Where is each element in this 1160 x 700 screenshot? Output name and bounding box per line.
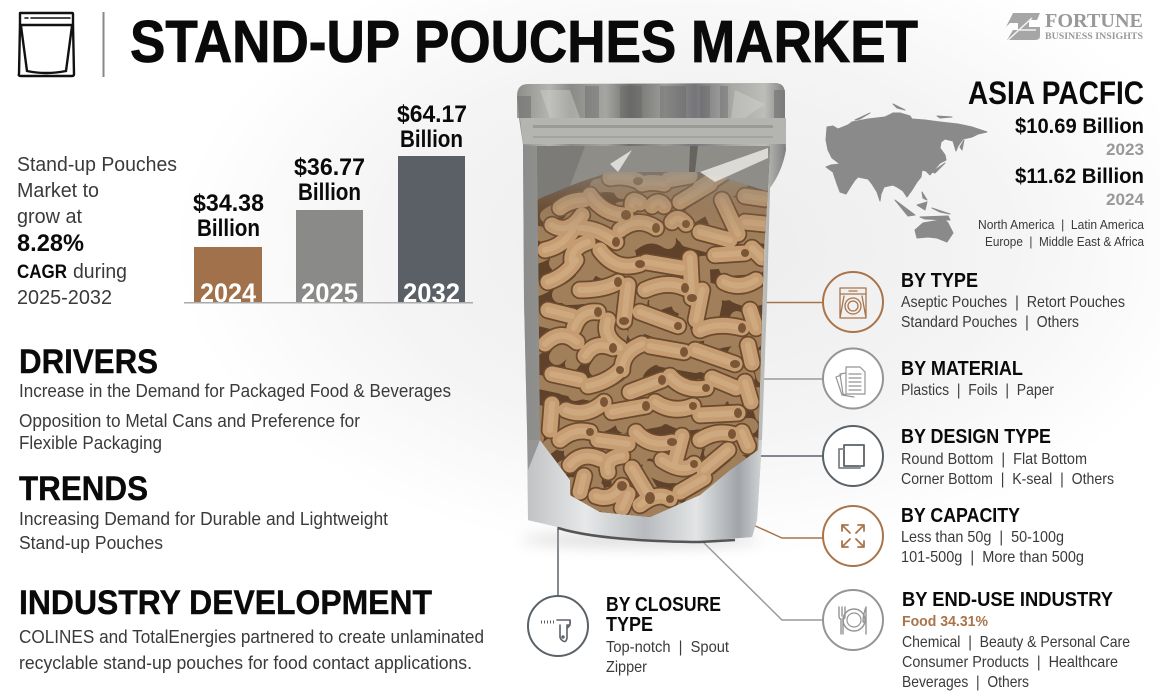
panel: by capacity: 101-500g | More than 500g bbox=[901, 549, 1084, 566]
panel: by type: Standard Pouches | Others bbox=[901, 314, 1079, 331]
panel: by type: BY TYPE bbox=[901, 270, 978, 292]
product image: stand-up pouch with pasta bbox=[517, 83, 786, 547]
panel: Asia Pacific: 2024 bbox=[1106, 190, 1145, 209]
panel: by design type: BY DESIGN TYPE bbox=[901, 426, 1051, 448]
pouch bottom rim bbox=[558, 528, 735, 542]
panel: by closure type: Zipper bbox=[606, 659, 648, 676]
CAGR text block: 8.28% bbox=[17, 230, 84, 257]
zipper band bbox=[520, 118, 786, 144]
icon: expand arrows bbox=[823, 506, 883, 566]
panel: industry development: recyclable stand-up pouches for food contact applications. bbox=[19, 653, 472, 673]
panel: by capacity: BY CAPACITY bbox=[901, 505, 1021, 527]
panel: by end-use industry: Consumer Products | Healthcare bbox=[902, 654, 1118, 671]
pouch body bbox=[517, 83, 786, 541]
panel: Asia Pacific: $10.69 Billion bbox=[1015, 115, 1144, 138]
panel: by material bbox=[823, 348, 1055, 408]
panel: by material: BY MATERIAL bbox=[901, 358, 1023, 380]
bar chart: market size bbox=[184, 101, 473, 308]
panel: by capacity bbox=[823, 505, 1084, 566]
CAGR text block: CAGR bbox=[17, 262, 67, 283]
map: Asia Pacific bbox=[826, 104, 987, 242]
CAGR text block: 2025-2032 bbox=[17, 287, 112, 309]
bar 2024: $34.38 bbox=[193, 190, 264, 217]
logo: Fortune Business Insights: FORTUNE bbox=[1045, 10, 1143, 32]
bar 2025: Billion bbox=[298, 179, 361, 206]
panel: industry development: COLINES and TotalEnergies partnered to create unlaminated bbox=[19, 627, 484, 647]
panel: drivers: Opposition to Metal Cans and Preference for bbox=[19, 411, 360, 431]
panel: by end-use industry: Food 34.31% bbox=[902, 613, 988, 630]
panel: by end-use industry: Beverages | Others bbox=[902, 674, 1029, 691]
panel: by end-use industry: Chemical | Beauty & Personal Care bbox=[902, 634, 1130, 651]
panel: drivers: Flexible Packaging bbox=[19, 433, 162, 453]
panel: by end-use industry bbox=[823, 589, 1130, 691]
title: STAND-UP POUCHES MARKET bbox=[130, 9, 918, 75]
icon: plate and cutlery bbox=[823, 590, 883, 650]
panel: trends: Increasing Demand for Durable and Lightweight bbox=[19, 509, 388, 529]
icon: pouch with circle bbox=[823, 272, 883, 332]
bar 2032 bbox=[397, 101, 467, 308]
panel: by design type bbox=[823, 426, 1114, 488]
panel: trends: TRENDS bbox=[19, 470, 148, 508]
panel: trends: Stand-up Pouches bbox=[19, 533, 163, 553]
panel: by type bbox=[823, 270, 1125, 332]
window with pasta bbox=[530, 140, 777, 525]
icon: paper sheets bbox=[823, 348, 883, 408]
logo: Fortune Business Insights bbox=[1006, 10, 1143, 42]
logo: Fortune Business Insights: BUSINESS INSIGHTS bbox=[1045, 32, 1143, 42]
panel: by closure type bbox=[528, 594, 730, 676]
panel: by closure type: BY CLOSURE bbox=[606, 594, 721, 616]
bar 2025 bbox=[294, 154, 365, 308]
panel: Asia Pacific: 2023 bbox=[1106, 140, 1144, 159]
bar 2025: 2025 bbox=[301, 278, 358, 308]
panel: Asia Pacific: North America | Latin America bbox=[978, 217, 1145, 232]
CAGR text block: Market to bbox=[17, 180, 99, 202]
bar 2024: 2024 bbox=[200, 278, 256, 308]
panel: by design type: Round Bottom | Flat Bottom bbox=[901, 451, 1087, 468]
panel: Asia Pacific: Europe | Middle East & Africa bbox=[985, 234, 1145, 249]
panel: industry development bbox=[19, 584, 484, 673]
panel: trends bbox=[19, 470, 388, 553]
pouch bottom gusset bbox=[527, 440, 762, 541]
CAGR text block: during bbox=[73, 261, 127, 283]
panel: by closure type: TYPE bbox=[606, 614, 653, 636]
panel: drivers: DRIVERS bbox=[19, 343, 158, 381]
CAGR text block: grow at bbox=[17, 206, 82, 228]
bar 2024 bbox=[193, 190, 264, 308]
panel: drivers bbox=[19, 343, 451, 453]
bar 2032: $64.17 bbox=[397, 101, 467, 128]
panel: Asia Pacific: $11.62 Billion bbox=[1015, 165, 1144, 188]
panel: drivers: Increase in the Demand for Packaged Food & Beverages bbox=[19, 381, 451, 401]
CAGR text block: Stand-up Pouches bbox=[17, 154, 177, 176]
panel: industry development: INDUSTRY DEVELOPMENT bbox=[19, 584, 432, 622]
panel: by end-use industry: BY END-USE INDUSTRY bbox=[902, 589, 1114, 611]
icon: zipper closure bbox=[528, 596, 588, 656]
bar 2024: Billion bbox=[197, 215, 260, 242]
pouch side seam bbox=[523, 145, 540, 470]
bar 2032: 2032 bbox=[403, 278, 460, 308]
panel: by capacity: Less than 50g | 50-100g bbox=[901, 529, 1064, 546]
title divider bbox=[102, 12, 104, 77]
panel: by material: Plastics | Foils | Paper bbox=[901, 382, 1055, 399]
icon: overlapping squares bbox=[823, 426, 883, 486]
panel: by type: Aseptic Pouches | Retort Pouches bbox=[901, 294, 1125, 311]
CAGR text block bbox=[17, 154, 177, 309]
icon: stand-up pouch outline bbox=[19, 13, 74, 76]
panel: by closure type: Top-notch | Spout bbox=[606, 639, 730, 656]
foil reflections bbox=[585, 86, 728, 118]
bar 2032: Billion bbox=[400, 126, 463, 153]
bar 2025: $36.77 bbox=[294, 154, 365, 181]
panel: Asia Pacific bbox=[968, 75, 1145, 249]
panel: by design type: Corner Bottom | K-seal | Others bbox=[901, 471, 1114, 488]
connector lines bbox=[558, 302, 824, 620]
